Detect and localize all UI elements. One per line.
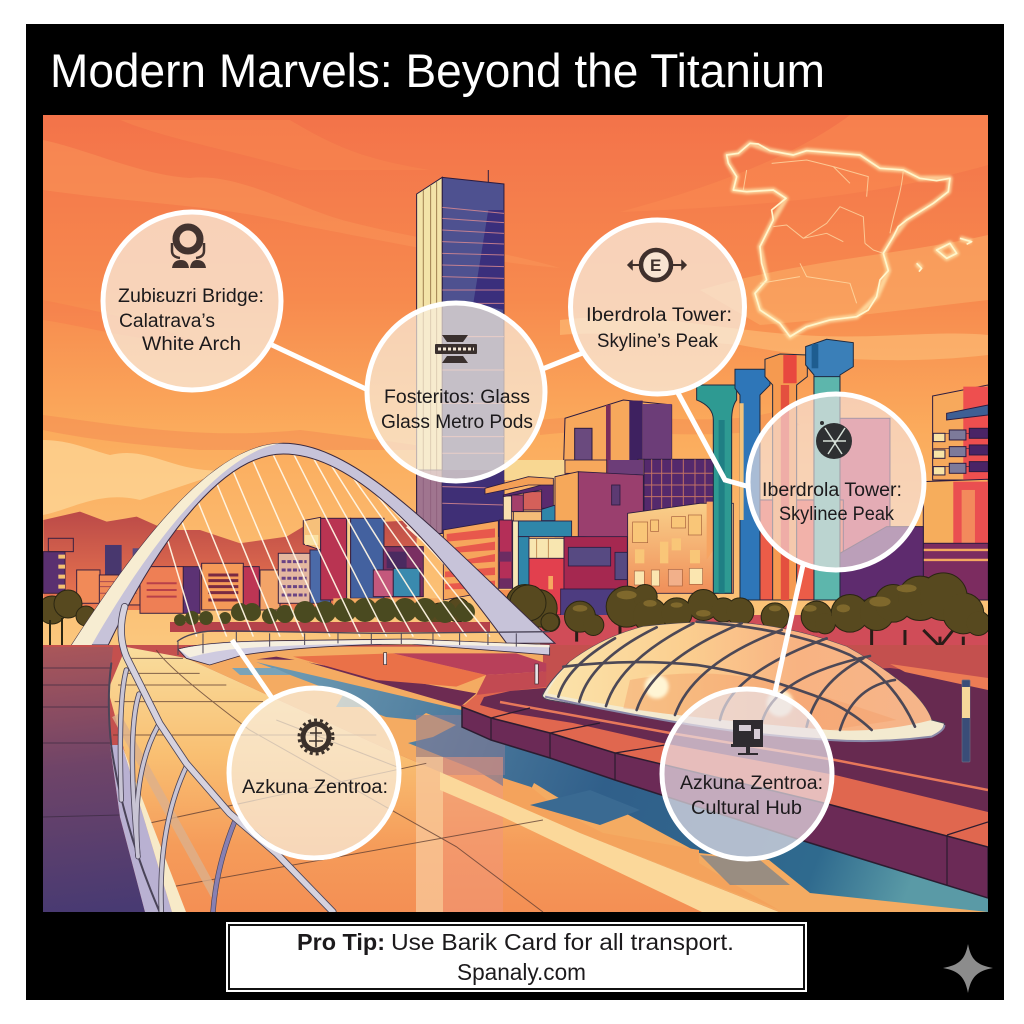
text: Iberdrola Tower: Skyline’s Peak xyxy=(597,331,718,352)
sparkle watermark xyxy=(943,944,993,993)
far right blocks and columns backdrop xyxy=(707,385,988,600)
text: Skylinee Peak xyxy=(762,480,902,525)
right tree line xyxy=(498,573,990,635)
text: Fosteritos: Glass Metro Pods xyxy=(381,412,533,433)
pink ground behind right trees xyxy=(540,615,988,645)
tower reflection on floor xyxy=(416,757,503,912)
colored cooling columns xyxy=(697,339,853,600)
left trees xyxy=(43,590,94,645)
peach block xyxy=(628,503,733,593)
crimson sliver xyxy=(499,520,512,588)
teal column xyxy=(697,385,737,593)
awning xyxy=(485,477,553,494)
text: Fosteritos xyxy=(381,387,533,433)
callout: Iberdrola Tower top xyxy=(570,220,744,394)
walkway edge xyxy=(110,745,172,912)
callout: Iberdrola Tower lower xyxy=(748,394,924,570)
icon: metro pod xyxy=(435,335,477,363)
icon: gear xyxy=(299,720,333,754)
glass dome xyxy=(543,622,944,741)
right light pole xyxy=(962,680,970,762)
icon: dark disc xyxy=(816,421,852,459)
small trees under arch xyxy=(170,598,490,632)
left concrete block xyxy=(43,647,145,912)
ground plane xyxy=(43,645,988,912)
orange column xyxy=(765,354,807,600)
text: Zubizuri Bridge: Zubiɛuzri Bridge: xyxy=(118,286,264,307)
mid-rise left stripes xyxy=(443,521,498,600)
sky clouds xyxy=(43,115,988,515)
tan diagonal rail panel xyxy=(116,715,215,895)
reflecting water xyxy=(186,658,988,912)
callout: Azkuna Zentroa left xyxy=(229,688,399,858)
connector lines xyxy=(232,345,803,698)
teal block xyxy=(518,521,572,537)
pro tip text: Pro Tip: xyxy=(297,929,385,955)
blocks right of the tower xyxy=(443,460,733,616)
magenta block xyxy=(555,472,578,537)
distant mountains and central city xyxy=(43,512,440,613)
Zubizuri bridge arch and cables xyxy=(72,443,555,645)
raised platform xyxy=(462,664,988,898)
text: Iberdrola Tower xyxy=(586,305,732,352)
tall blue column xyxy=(806,339,853,600)
pro tip text: Use Barik Card for all transport. xyxy=(391,929,734,955)
water shadows xyxy=(232,662,988,912)
glowing map of Spain xyxy=(727,143,972,337)
curved footbridge xyxy=(177,631,550,684)
tree trunks right xyxy=(575,626,965,645)
icon: cultural hub xyxy=(731,720,763,755)
upper stack xyxy=(503,496,512,520)
floor tile lines xyxy=(113,650,543,912)
panel: city illustration xyxy=(38,115,990,912)
text: Zubizuri Bridge: White Arch xyxy=(142,334,241,355)
pro tip box xyxy=(226,922,807,992)
text: Zubizuri Bridge xyxy=(118,286,264,355)
blue column xyxy=(735,369,770,600)
trees near tower base xyxy=(428,585,559,631)
text: Cultural Hub xyxy=(680,773,823,819)
canal back basins xyxy=(231,646,546,706)
right city upper blocks xyxy=(563,400,713,511)
text: Fosteritos: Fosteritos: Glass xyxy=(384,387,530,408)
railing xyxy=(109,607,333,912)
title: Modern Marvels: Beyond the Titanium xyxy=(50,44,825,97)
callout: Fosteritos xyxy=(367,303,545,481)
callout: Zubizuri Bridge xyxy=(103,212,281,390)
Iberdrola skyscraper xyxy=(417,170,504,537)
icon: E emblem xyxy=(628,250,686,280)
icon: E emblem: E xyxy=(650,256,661,275)
text: Azkuna Zentroa: Azkuna Zentroa: xyxy=(242,777,388,798)
walkway floor xyxy=(108,647,779,912)
text: Zubizuri Bridge: Calatrava’s xyxy=(119,311,215,332)
callout: Azkuna Zentroa right xyxy=(662,689,832,859)
text: Cultural Hub: Azkuna Zentroa: xyxy=(680,773,823,794)
icon: bridge camera xyxy=(172,227,206,268)
olive lawn xyxy=(875,648,988,668)
sky background xyxy=(43,115,988,655)
text: Iberdrola Tower: Iberdrola Tower: xyxy=(586,305,732,326)
website text: Spanaly.com xyxy=(457,959,586,985)
text: Skylinee Peak: Skylinee Peak xyxy=(779,504,894,525)
text: Skylinee Peak: Iberdrola Tower: xyxy=(762,480,902,501)
text: Cultural Hub: Cultural Hub xyxy=(691,798,802,819)
cream floor edge strip xyxy=(440,772,779,912)
